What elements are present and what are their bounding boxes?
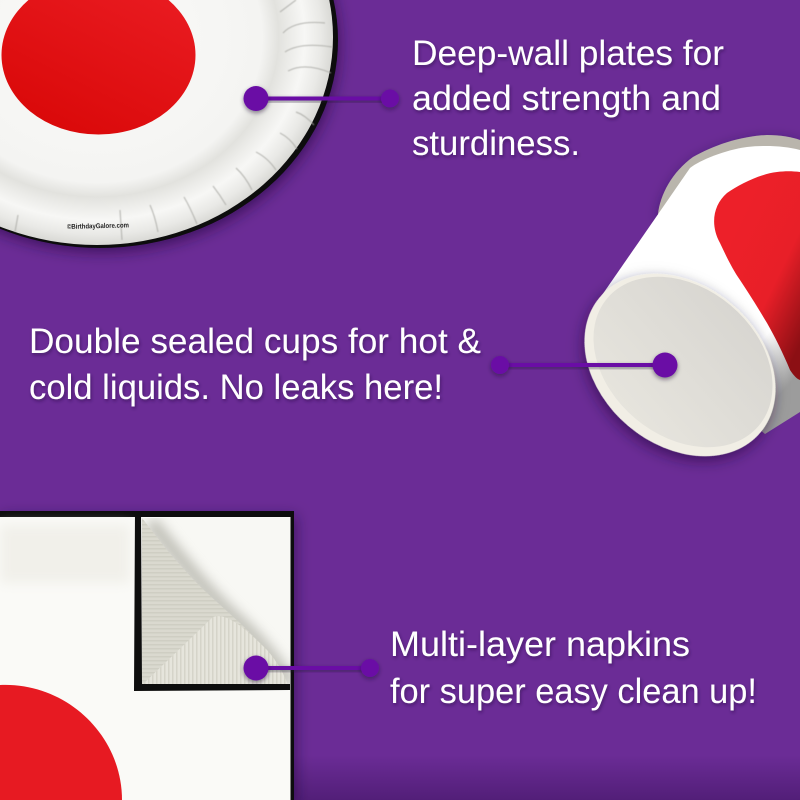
napkin texture band	[0, 525, 130, 583]
copyright text: ©BirthdayGalore.com	[67, 221, 129, 231]
plate large dot	[244, 86, 268, 111]
plate caption: sturdiness.	[412, 124, 580, 163]
cup small dot	[491, 356, 509, 374]
cup caption	[29, 322, 481, 407]
cup base inner	[560, 242, 800, 482]
panel: napkin	[0, 511, 294, 800]
fold inner panel	[142, 517, 290, 685]
plate connector line	[256, 96, 390, 100]
napkin black edge	[0, 511, 294, 800]
plate rim pleats	[15, 0, 332, 240]
napkin large dot	[244, 656, 268, 680]
napkin connector line	[256, 666, 370, 670]
napkin caption	[390, 625, 757, 711]
cup rim	[658, 135, 800, 226]
fold shadow	[150, 522, 290, 684]
bottom vignette	[0, 755, 800, 800]
panel: paper plate	[0, 0, 338, 248]
cup red shape	[714, 171, 800, 380]
cup base outer	[548, 236, 800, 494]
plate caption: added strength and	[412, 79, 721, 118]
callout: napkins	[244, 625, 757, 711]
napkin red circle	[0, 685, 122, 800]
cup caption: cold liquids. No leaks here!	[29, 368, 443, 407]
plate red circle	[2, 0, 196, 134]
napkin caption: Multi-layer napkins	[390, 625, 690, 664]
callout: plates	[244, 34, 724, 163]
cup large dot	[652, 352, 678, 378]
plate surface	[0, 0, 333, 245]
cup caption: Double sealed cups for hot &	[29, 322, 481, 361]
plate black edge	[0, 0, 338, 248]
folded layer underside	[142, 518, 252, 684]
fold lighter stripe area	[143, 616, 288, 685]
fold upper layer	[142, 517, 290, 684]
napkin fold black border	[134, 511, 290, 691]
cup body	[600, 146, 800, 434]
napkin caption: for super easy clean up!	[390, 672, 757, 711]
plate caption	[412, 34, 724, 163]
napkin surface	[0, 517, 290, 800]
callout: cups	[29, 322, 678, 407]
napkin small dot	[361, 659, 379, 677]
panel: paper cup	[548, 135, 800, 494]
plate small dot	[381, 90, 399, 108]
cup connector line	[500, 363, 665, 367]
plate caption: Deep-wall plates for	[412, 34, 724, 73]
